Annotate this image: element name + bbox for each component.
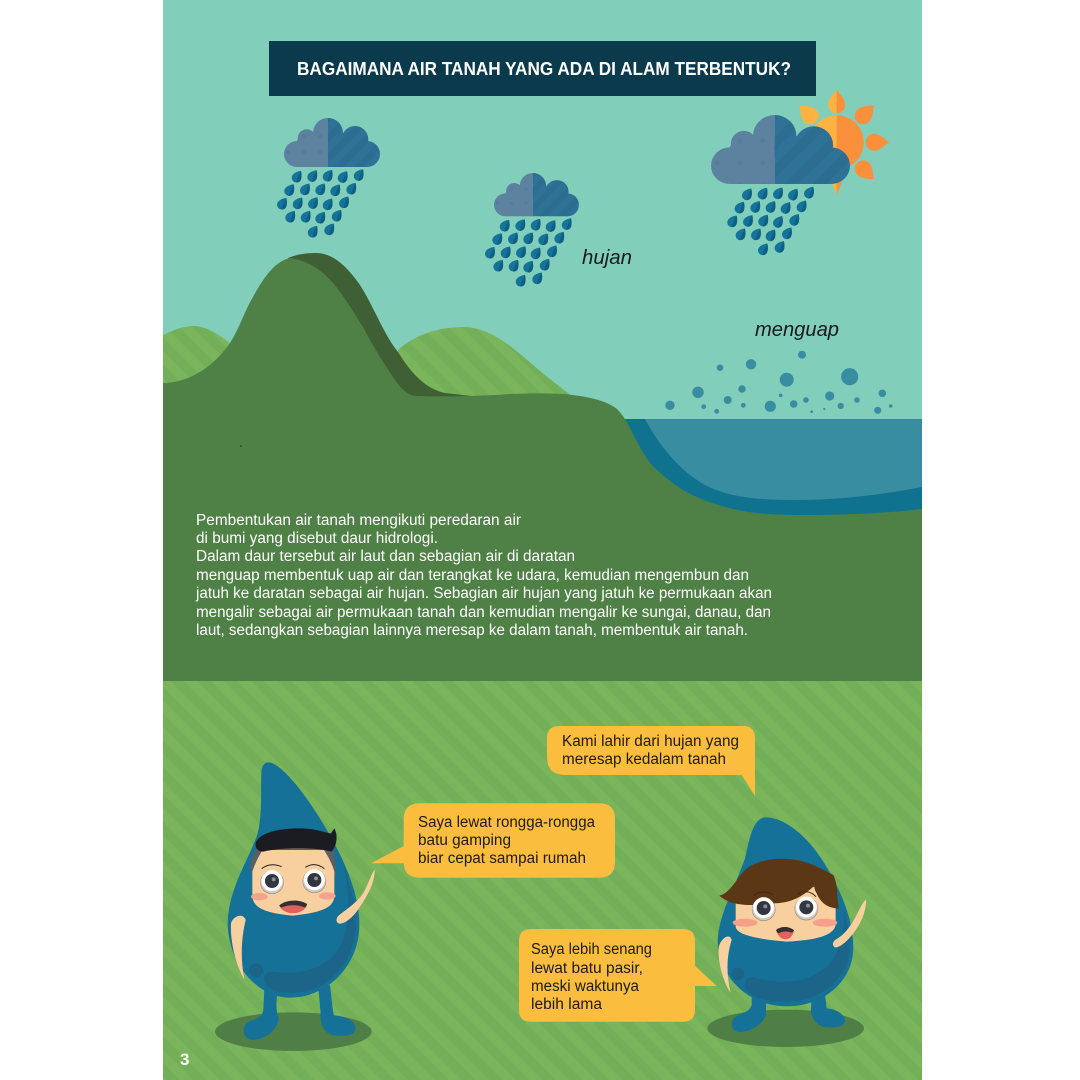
body text: Dalam daur tersebut air laut dan sebagian air di daratan [196,548,575,565]
speech bubble: middle: batu gamping [418,832,511,849]
body shading [264,863,356,993]
legs [732,993,845,1032]
label: hujan: hujan [582,247,632,269]
background page [163,0,922,1080]
shadow [215,1012,372,1051]
ground speck [240,445,242,447]
land [163,258,922,681]
lake surface [645,419,922,500]
label: menguap: menguap [755,319,839,341]
eyes [260,869,326,894]
lower striped ground [163,681,922,1080]
arms [719,899,866,993]
body text: jatuh ke daratan sebagai air hujan. Sebagian air hujan yang jatuh ke permukaan akan [195,585,772,602]
sky [163,0,922,420]
title [269,41,816,96]
speech bubble: top [547,726,755,796]
speech bubble: bottom: lebih lama [531,996,602,1013]
cheeks [733,919,837,927]
body text: mengalir sebagai air permukaan tanah dan kemudian mengalir ke sungai, danau, dan [196,604,771,621]
mouth [776,927,794,939]
brows [262,865,324,869]
cloud and rain right [711,115,850,255]
sideburns [250,843,336,880]
speech bubble: middle [371,803,615,878]
brows [754,892,816,897]
distant striped hills [163,326,575,400]
infographic page [163,0,922,1080]
body text: menguap membentuk uap air dan terangkat ke udara, kemudian mengembun dan [196,567,749,584]
legs [244,985,356,1040]
speech bubble: middle: biar cepat sampai rumah [418,850,586,867]
body text [195,512,772,639]
shadow [707,1010,864,1047]
cloud and rain left [277,118,380,238]
dark hill ridge [288,253,480,400]
body text: Pembentukan air tanah mengikuti peredaran air [196,512,521,529]
lake outer [625,419,922,515]
icon: sun [794,90,889,195]
body [718,817,853,1006]
body spot [249,963,263,977]
arms [231,869,375,979]
speech bubble: bottom: meski waktunya [531,978,639,995]
speech bubble: bottom: Saya lebih senang [531,941,652,958]
title: BAGAIMANA AIR TANAH YANG ADA DI ALAM TERBENTUK? [297,59,791,79]
eyes [752,896,818,921]
character: child with brown hair [707,817,866,1047]
speech bubble: top: Kami lahir dari hujan yang [562,733,739,750]
face [736,875,836,942]
speech bubble: bottom [519,929,717,1022]
mouth [279,901,307,913]
hair [256,828,337,852]
page number: 3 [180,1050,189,1069]
body [228,762,359,998]
speech bubble: bottom: lewat batu pasir, [531,960,643,977]
cloud and rain centre [485,173,579,287]
cheeks [251,892,336,900]
speech bubble: middle: Saya lewat rongga-rongga [418,814,595,831]
evaporation bubbles [665,351,892,414]
body shading [745,908,850,1002]
body text: di bumi yang disebut daur hidrologi. [196,530,438,547]
body text: laut, sedangkan sebagian lainnya meresap ke dalam tanah, membentuk air tanah. [196,622,748,639]
hair [719,859,839,908]
speech bubble: top: meresap kedalam tanah [562,751,726,768]
face [252,850,334,916]
character: boy with black hair [215,762,375,1051]
body spot [732,968,744,980]
